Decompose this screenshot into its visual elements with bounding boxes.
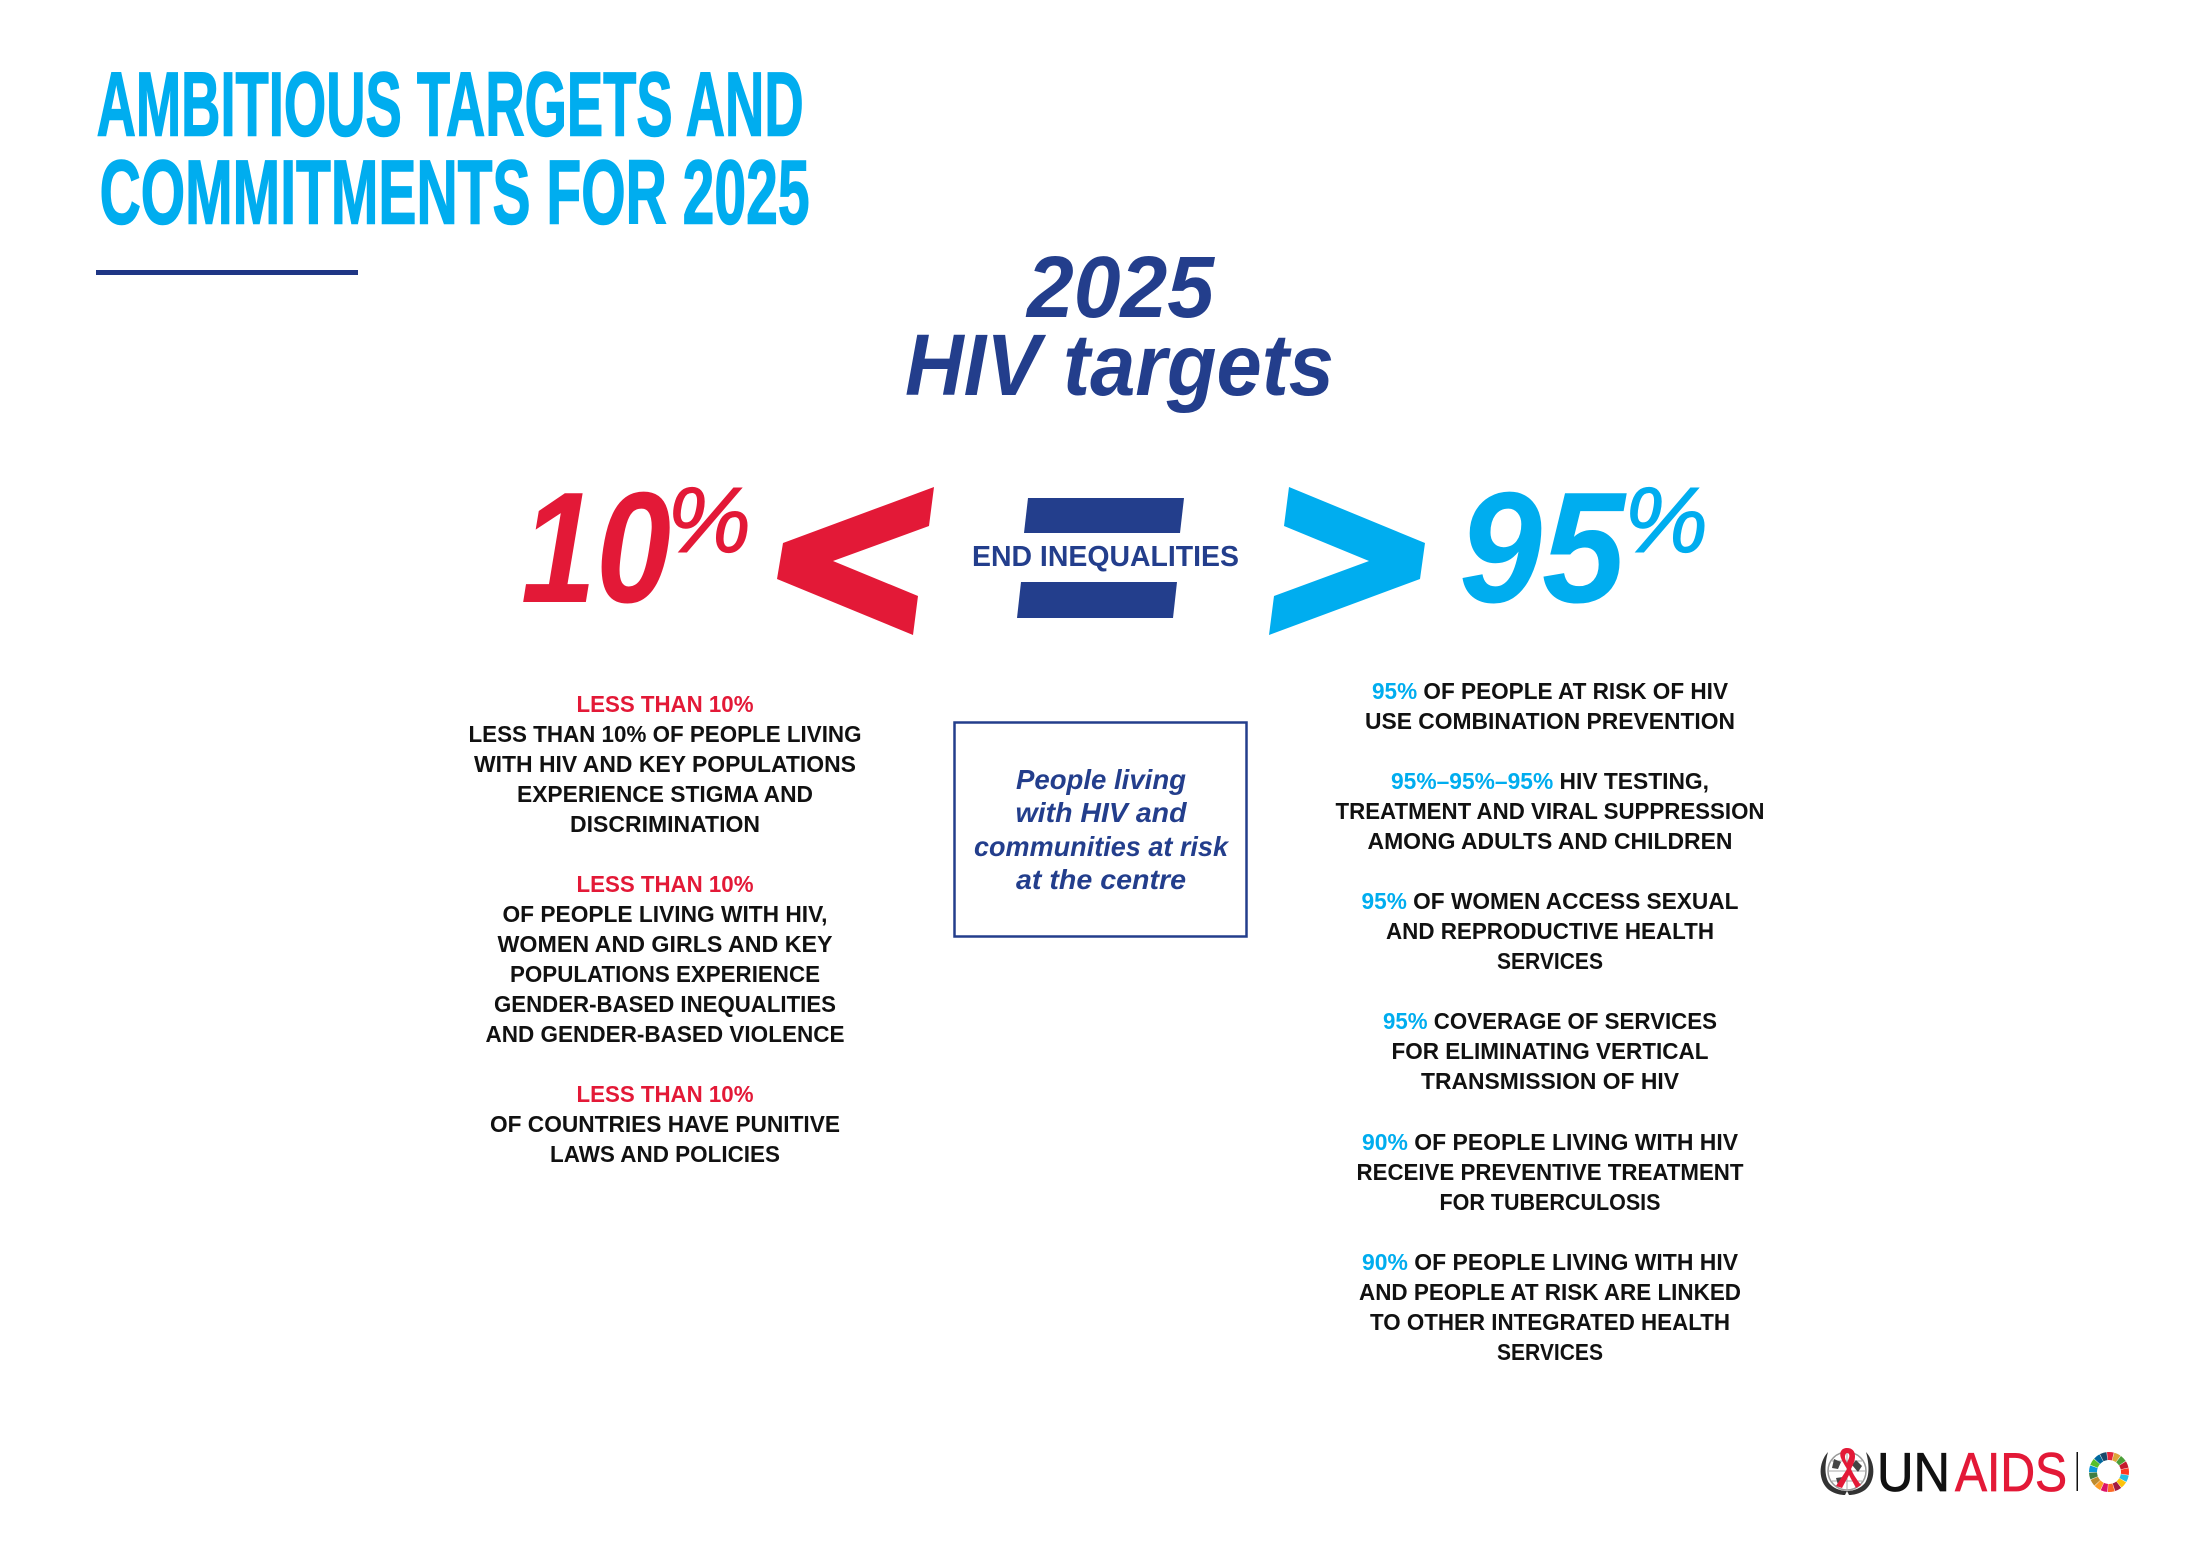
right column: 95% targets: AND REPRODUCTIVE HEALTH [1386,918,1714,944]
left column: less than 10% targets: OF PEOPLE LIVING WITH HIV, [502,901,828,927]
left column: less than 10% targets: LESS THAN 10% [576,1081,754,1107]
right column: 95% targets: USE COMBINATION PREVENTION [1365,708,1735,734]
centre callout box: communities at risk [974,831,1229,862]
right column: 95% targets: AND PEOPLE AT RISK ARE LINKED [1359,1279,1741,1305]
right column: 95% targets: RECEIVE PREVENTIVE TREATMENT [1356,1159,1744,1185]
right column: 95% targets: SERVICES [1497,1339,1603,1365]
heading: 2025 HIV targets: HIV targets [905,317,1334,414]
right column: 95% targets: SERVICES [1497,948,1603,974]
centre callout box: with HIV and [1016,797,1187,828]
heading: 2025 HIV targets: 2025 [1025,239,1216,336]
left column: less than 10% targets [468,691,862,1167]
right column: 95% targets: 95% OF WOMEN ACCESS SEXUAL [1362,888,1738,914]
big number: 10%: % [667,468,751,572]
left column: less than 10% targets: GENDER-BASED INEQUALITIES [494,991,836,1017]
right column: 95% targets [1336,678,1764,1365]
less-than arrow [777,487,934,635]
right column: 95% targets: TREATMENT AND VIRAL SUPPRESSION [1336,798,1764,824]
icon: SDG colour wheel [2086,1449,2132,1495]
right column: 95% targets: 95% COVERAGE OF SERVICES [1383,1008,1717,1034]
right column: 95% targets: FOR ELIMINATING VERTICAL [1392,1038,1708,1064]
right column: 95% targets: TRANSMISSION OF HIV [1421,1068,1680,1094]
heading: 2025 HIV targets [905,239,1334,414]
left column: less than 10% targets: EXPERIENCE STIGMA AND [517,781,813,807]
centre callout box: People living [1016,764,1186,795]
right column: 95% targets: FOR TUBERCULOSIS [1440,1189,1660,1215]
centre callout box: at the centre [1016,864,1186,895]
left column: less than 10% targets: POPULATIONS EXPERIENCE [510,961,820,987]
left column: less than 10% targets: LESS THAN 10% [576,691,754,717]
title: AMBITIOUS TARGETS AND [97,54,804,156]
wordmark: UNAIDS [1877,1441,2067,1503]
title: COMMITMENTS FOR 2025 [100,142,810,244]
left column: less than 10% targets: DISCRIMINATION [570,811,760,837]
left column: less than 10% targets: AND GENDER-BASED VIOLENCE [486,1021,844,1047]
right column: 95% targets: 95%–95%–95% HIV TESTING, [1391,768,1709,794]
left column: less than 10% targets: WITH HIV AND KEY POPULATIONS [474,751,856,777]
left column: less than 10% targets: LAWS AND POLICIES [550,1141,780,1167]
equals bars with end inequalities: END INEQUALITIES [972,541,1239,573]
big number: 10%: 10 [521,460,671,636]
title [97,54,810,244]
big number: 95%: % [1624,468,1708,572]
UNAIDS logo [1821,1441,2132,1503]
wordmark: UNAIDS: UN [1877,1441,1950,1503]
title rule [96,270,358,275]
left column: less than 10% targets: LESS THAN 10% [576,871,754,897]
left column: less than 10% targets: OF COUNTRIES HAVE PUNITIVE [490,1111,840,1137]
right column: 95% targets: 90% OF PEOPLE LIVING WITH HIV [1362,1249,1739,1275]
greater-than arrow [1269,487,1425,635]
right column: 95% targets: TO OTHER INTEGRATED HEALTH [1370,1309,1730,1335]
icon: UN emblem with red ribbon [1821,1448,1873,1495]
right column: 95% targets: 95% OF PEOPLE AT RISK OF HIV [1372,678,1729,704]
left column: less than 10% targets: LESS THAN 10% OF PEOPLE LIVING [468,721,862,747]
wordmark: UNAIDS: AIDS [1955,1441,2067,1503]
equals bars with end inequalities [972,498,1239,618]
big number: 95%: 95 [1459,460,1627,636]
right column: 95% targets: AMONG ADULTS AND CHILDREN [1368,828,1732,854]
centre callout box [954,722,1246,936]
right column: 95% targets: 90% OF PEOPLE LIVING WITH HIV [1362,1129,1739,1155]
left column: less than 10% targets: WOMEN AND GIRLS AND KEY [498,931,832,957]
